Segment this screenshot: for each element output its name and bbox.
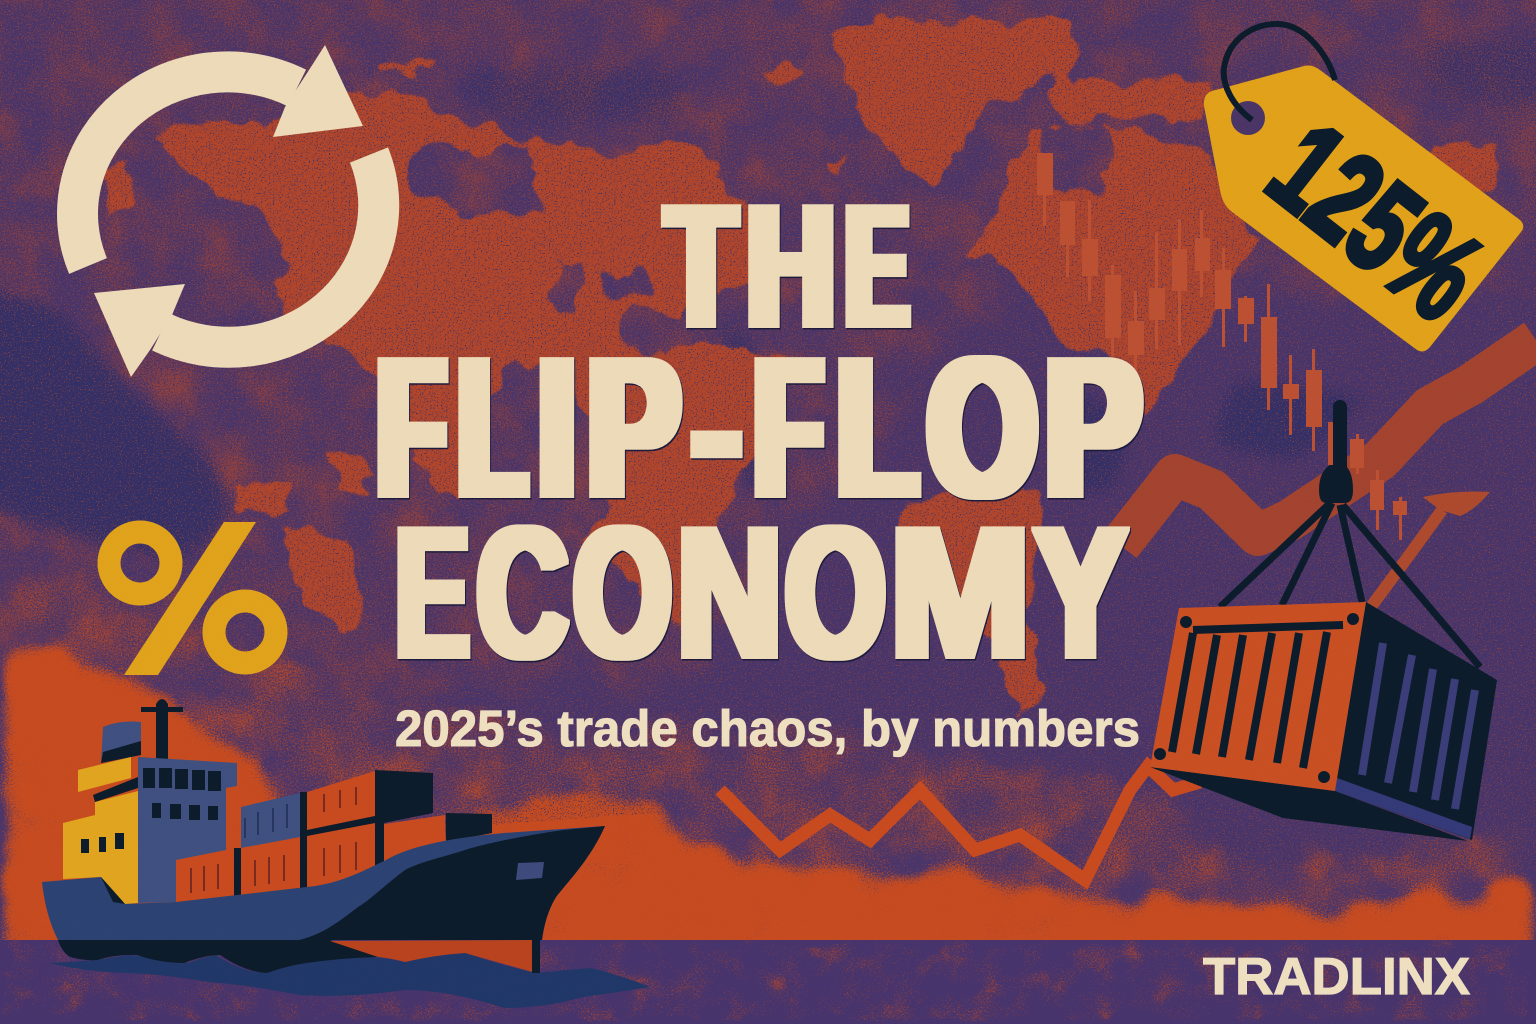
- title: O: [574, 488, 672, 697]
- containers: [176, 770, 492, 902]
- subtitle: 2025’s trade chaos, by numbers: [395, 700, 1140, 757]
- title: F: [378, 317, 445, 539]
- hull: [42, 826, 605, 940]
- icon: circular flip-flop arrows: [78, 45, 379, 377]
- title: L: [837, 317, 918, 539]
- title: F: [755, 317, 822, 539]
- water under ship: [50, 953, 650, 1008]
- title: H: [747, 168, 835, 363]
- title: L: [459, 317, 526, 539]
- funnel: [101, 722, 141, 763]
- thick rising trend line: [1120, 340, 1536, 545]
- title: T: [667, 168, 736, 363]
- thin zigzag arrow line: [720, 492, 1490, 880]
- container front face: [1150, 602, 1366, 791]
- brand name: TRADLINX: [1203, 948, 1470, 1006]
- candlestick chart: [1037, 153, 1407, 540]
- title: O: [928, 317, 1037, 539]
- icon: price tag: [1204, 24, 1523, 351]
- title: E: [396, 488, 469, 697]
- title: P: [1046, 317, 1141, 539]
- mast: [141, 699, 183, 760]
- orange haze clouds: [0, 570, 1536, 940]
- hanging shipping container: [1150, 407, 1497, 841]
- title: E: [846, 168, 908, 363]
- container ship: [42, 699, 650, 1008]
- orange ground: [0, 640, 1536, 1000]
- icon: yellow percent sign: [109, 522, 276, 675]
- title: N: [677, 488, 782, 697]
- crane hook and ropes: [1220, 407, 1480, 667]
- title: O: [785, 488, 886, 697]
- title: M: [890, 488, 1030, 697]
- title: -: [693, 317, 740, 539]
- title: Y: [1035, 488, 1126, 697]
- title: I: [539, 317, 575, 539]
- title: P: [588, 317, 679, 539]
- container side and base: [1335, 602, 1497, 840]
- sea band: [0, 940, 1536, 1024]
- superstructure: [138, 757, 237, 903]
- title: C: [477, 488, 568, 697]
- hull reflection: [58, 940, 378, 973]
- world map landmasses: [102, 20, 1506, 718]
- title: [378, 168, 1141, 697]
